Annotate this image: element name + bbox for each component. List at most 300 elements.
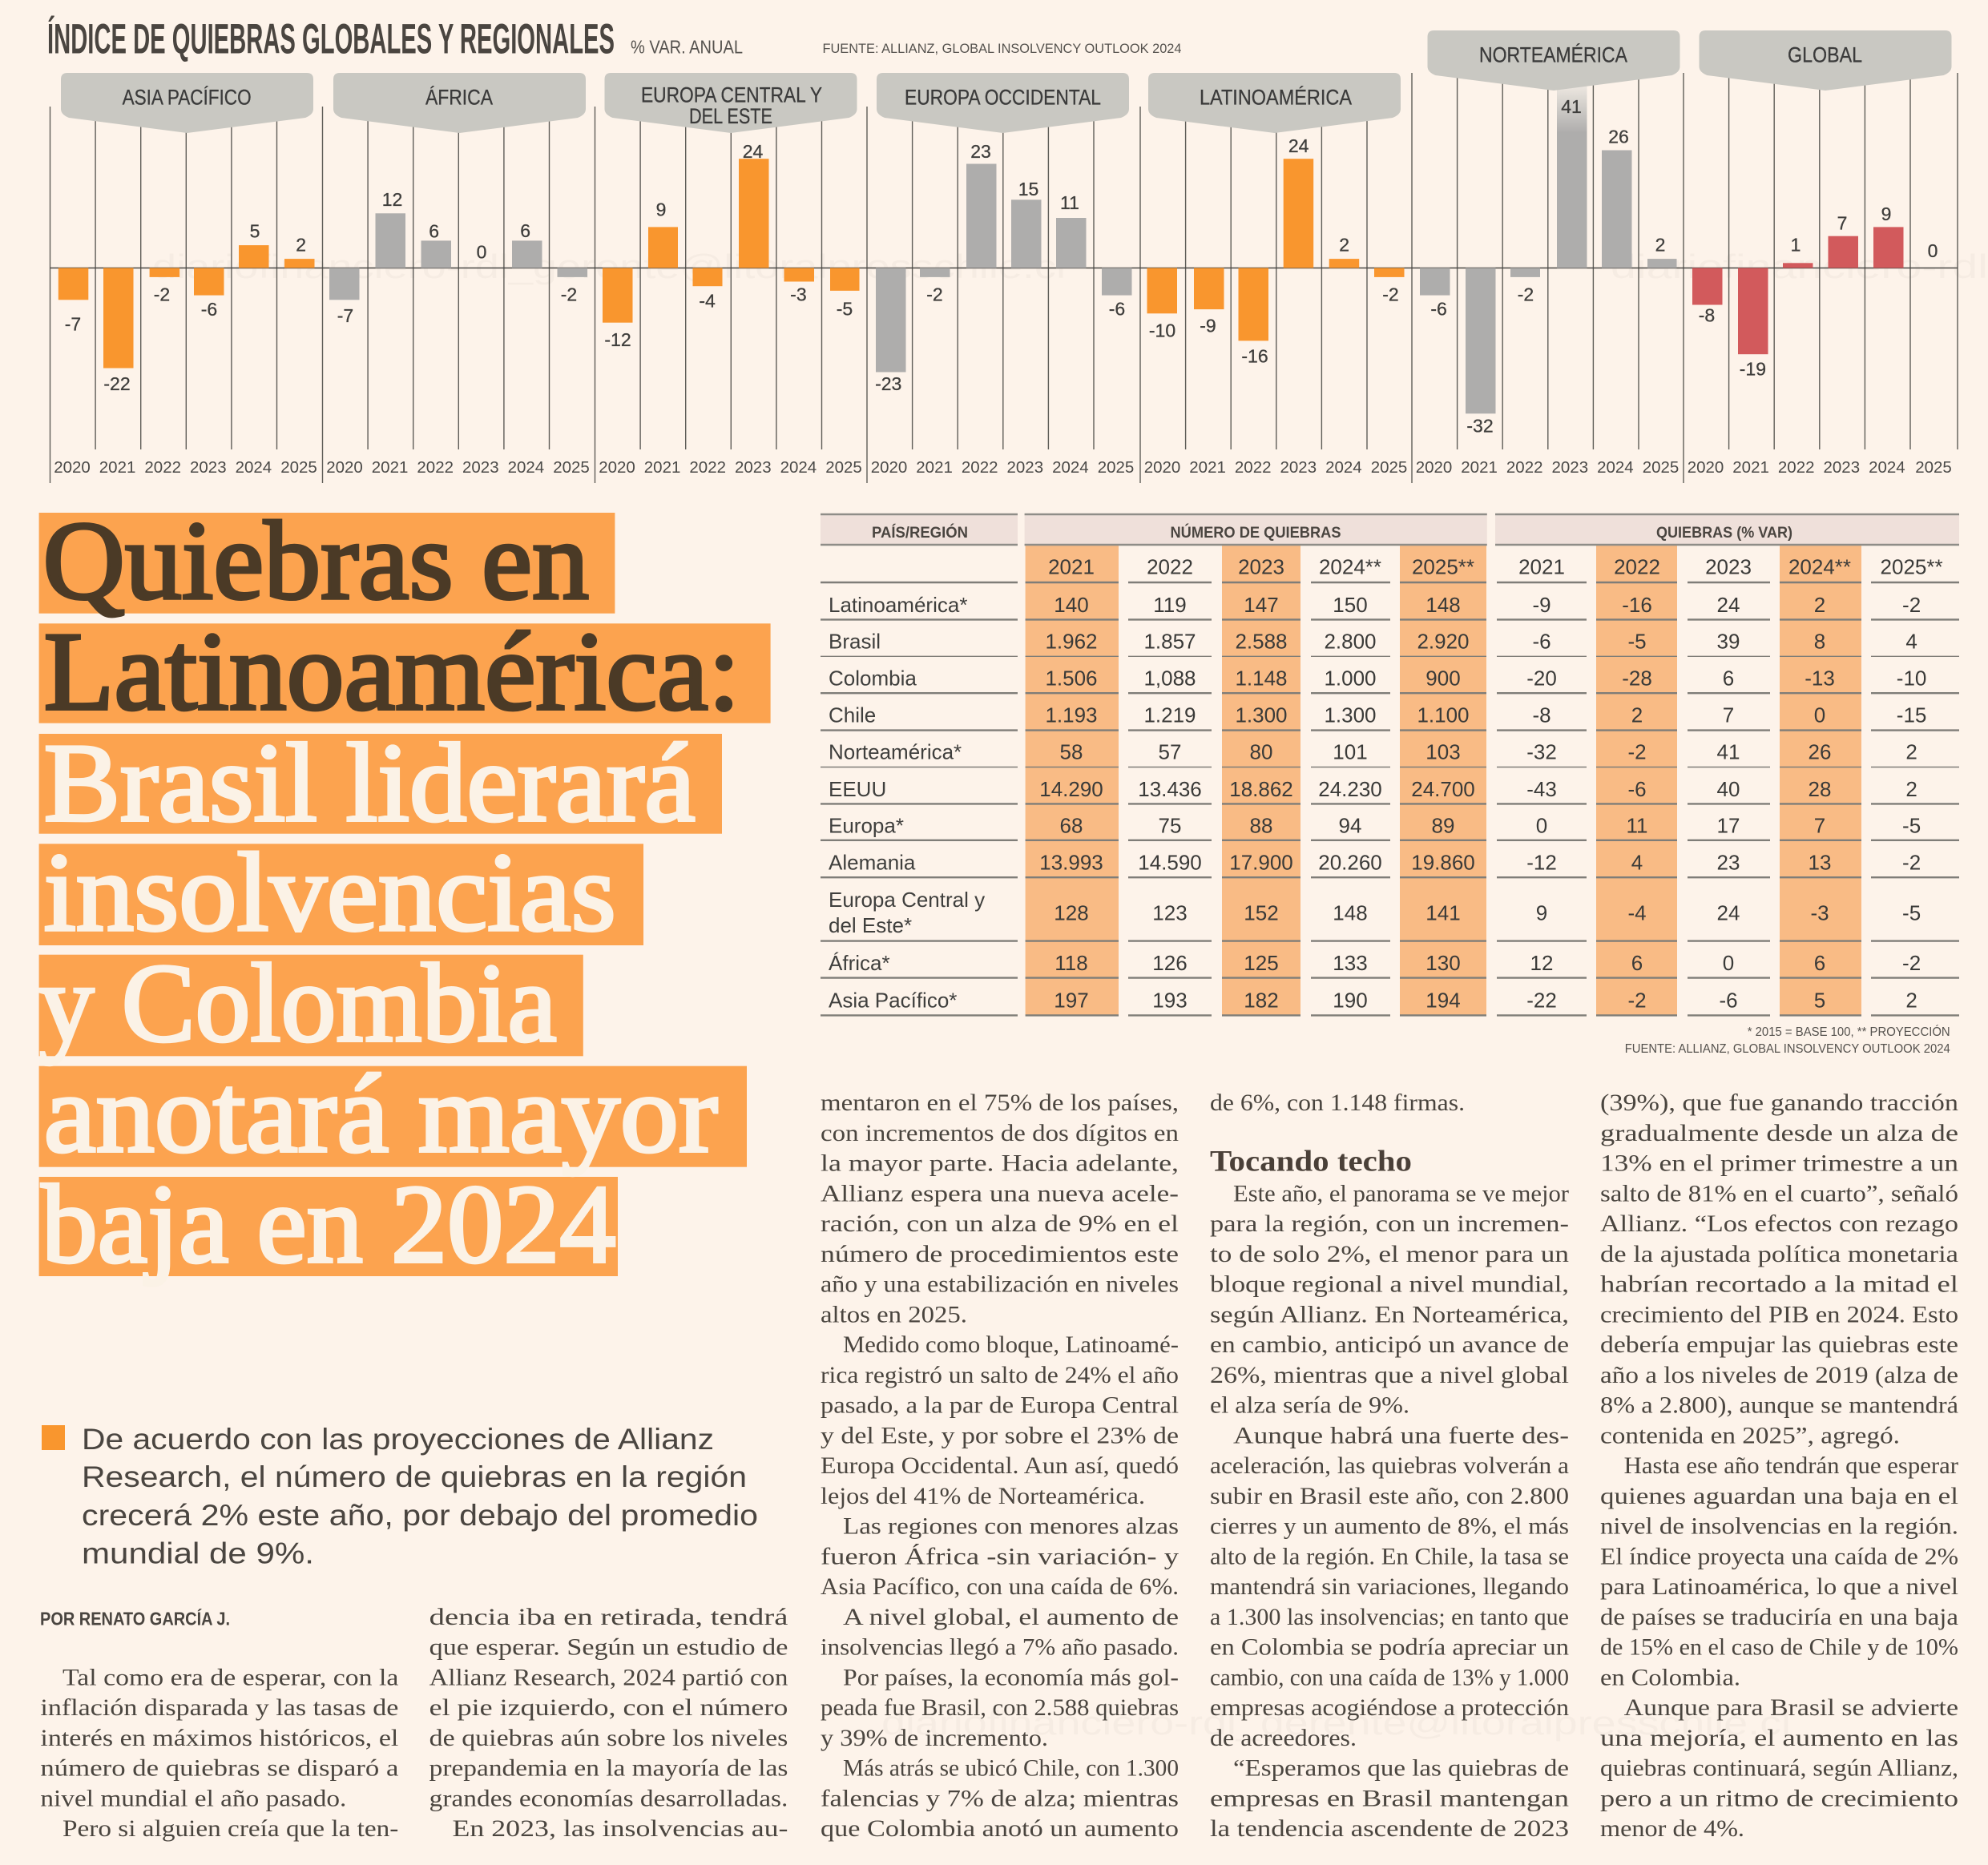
article column 3: Las regiones con menores alzas xyxy=(843,1513,1179,1540)
article column 5: Hasta ese año tendrán que esperar xyxy=(1624,1452,1958,1479)
year axis labels: 2023 xyxy=(735,458,772,477)
row: Norteamérica: 26 xyxy=(1809,740,1831,764)
article column 4: a 1.300 las insolvencias; en tanto que xyxy=(1210,1604,1569,1630)
row: Chile: Chile xyxy=(829,703,876,727)
article column 4: to de solo 2%, el menor para un xyxy=(1210,1241,1569,1267)
row: Chile: 1.300 xyxy=(1235,703,1288,727)
row: África: 133 xyxy=(1333,951,1368,975)
row: Colombia: 1.148 xyxy=(1235,667,1288,691)
row: Brasil: 2.920 xyxy=(1417,630,1470,654)
row: Latinoamérica: -16 xyxy=(1622,593,1652,617)
callout: Latinoamérica xyxy=(1148,73,1401,133)
year axis labels: 2021 xyxy=(1732,458,1769,477)
row: África: 130 xyxy=(1425,951,1461,975)
year axis labels: 2025 xyxy=(1915,458,1952,477)
year axis labels: 2020 xyxy=(54,458,91,477)
article column 5: una mejoría, el aumento en las xyxy=(1600,1725,1958,1751)
bars: Europa Central y del Este xyxy=(603,159,859,323)
value labels: -12 xyxy=(604,329,631,350)
row: Europa Central y del Este: -4 xyxy=(1627,900,1647,924)
bars: Global xyxy=(1692,227,1904,354)
row: Europa xyxy=(829,814,1921,838)
summary callout: crecerá 2% este año, por debajo del promedio xyxy=(82,1499,758,1532)
article column 5: crecimiento del PIB en 2024. Esto xyxy=(1600,1301,1958,1327)
article column 4: Este año, el panorama se ve mejor xyxy=(1233,1180,1569,1206)
value labels: 7 xyxy=(1837,213,1847,234)
row: EEUU: 28 xyxy=(1809,777,1831,801)
table highlight columns xyxy=(1026,546,1861,1015)
article column 2: el pie izquierdo, con el número xyxy=(429,1694,788,1721)
value labels: 24 xyxy=(743,141,763,162)
article column 3: Medido como bloque, Latinoamé- xyxy=(843,1331,1179,1358)
row: Colombia xyxy=(829,667,1926,691)
summary callout xyxy=(42,1423,758,1570)
callout: Asia Pacífico: ASIA PACÍFICO xyxy=(123,85,252,109)
article column 5: Aunque para Brasil se advierte xyxy=(1624,1694,1958,1721)
year axis labels: 2020 xyxy=(1416,458,1452,477)
row: África: 126 xyxy=(1152,951,1188,975)
row: África: África* xyxy=(829,951,890,975)
article column 1: Pero si alguien creía que la ten- xyxy=(63,1815,398,1842)
year axis labels: 2023 xyxy=(1006,458,1043,477)
row: Chile: 1.300 xyxy=(1324,703,1377,727)
headline: baja en 2024 xyxy=(42,1162,616,1287)
year axis labels: 2022 xyxy=(689,458,726,477)
article column 3: falencias y 7% de alza; mientras xyxy=(821,1785,1179,1811)
row: EEUU: 14.290 xyxy=(1039,777,1103,801)
article column 5: en Colombia. xyxy=(1600,1664,1740,1690)
row: EEUU: 24.230 xyxy=(1318,777,1382,801)
value labels xyxy=(65,96,1938,437)
row: EEUU xyxy=(829,777,1917,801)
article column 4: según Allianz. En Norteamérica, xyxy=(1210,1301,1569,1327)
year axis labels: 2024 xyxy=(1597,458,1634,477)
year axis labels: 2022 xyxy=(962,458,998,477)
bar chart: regional insolvency index xyxy=(50,30,1988,483)
article column 1: nivel mundial el año pasado. xyxy=(40,1785,346,1811)
row: Europa: 94 xyxy=(1339,814,1361,838)
row: Asia Pacífico: 182 xyxy=(1244,989,1279,1013)
article column 5: debería empujar las quiebras este xyxy=(1600,1331,1958,1358)
callout: Europa Central y del Este: EUROPA CENTRAL Y xyxy=(641,83,822,107)
article column 3: lejos del 41% de Norteamérica. xyxy=(821,1483,1145,1509)
callout: Europa Occidental xyxy=(877,73,1129,133)
value labels: -2 xyxy=(154,284,170,305)
table years row: 2021 xyxy=(1048,554,1095,578)
year axis labels: 2023 xyxy=(1551,458,1588,477)
row: Chile: 1.100 xyxy=(1417,703,1470,727)
headline xyxy=(39,499,771,1287)
row: Europa Central y del Este: 152 xyxy=(1244,900,1279,924)
article column 1: interés en máximos históricos, el xyxy=(40,1725,398,1751)
value labels: -9 xyxy=(1200,315,1216,336)
table years row: 2022 xyxy=(1147,554,1193,578)
year axis labels: 2025 xyxy=(1371,458,1407,477)
value labels: 5 xyxy=(250,221,260,242)
value labels: -2 xyxy=(926,284,943,305)
article column 2 xyxy=(429,1604,788,1842)
row: Brasil: 2.588 xyxy=(1235,630,1288,654)
value labels: -6 xyxy=(1109,298,1125,319)
article column 5: pero a un ritmo de crecimiento xyxy=(1600,1785,1958,1811)
row: Norteamérica: Norteamérica* xyxy=(829,740,962,764)
row: Europa: 7 xyxy=(1814,814,1825,838)
article column 5: año a los niveles de 2019 (alza de xyxy=(1600,1362,1958,1388)
year axis labels: 2023 xyxy=(1823,458,1860,477)
article column 3: año y una estabilización en niveles xyxy=(821,1271,1179,1298)
bars: Latinoamérica xyxy=(1147,159,1404,340)
article column 4: de acreedores. xyxy=(1210,1725,1357,1751)
year axis labels: 2021 xyxy=(644,458,680,477)
article column 4: empresas en Brasil mantengan xyxy=(1210,1785,1569,1811)
article column 4: alto de la región. En Chile, la tasa se xyxy=(1210,1543,1569,1569)
row: Colombia: Colombia xyxy=(829,667,917,691)
row: Colombia: 1.000 xyxy=(1324,667,1377,691)
row: Europa: 68 xyxy=(1060,814,1083,838)
article column 3: que Colombia anotó un aumento xyxy=(821,1815,1179,1842)
icon: orange square bullet xyxy=(42,1425,65,1450)
value labels: 11 xyxy=(1060,192,1079,213)
row: Norteamérica: 101 xyxy=(1333,740,1368,764)
value labels: 15 xyxy=(1018,179,1038,199)
row: Asia Pacífico: -2 xyxy=(1627,989,1647,1013)
row: Chile: 2 xyxy=(1631,703,1643,727)
year axis labels: 2025 xyxy=(1643,458,1679,477)
article column 4: bloque regional a nivel mundial, xyxy=(1210,1271,1569,1298)
article column 5: de la ajustada política monetaria xyxy=(1600,1241,1958,1267)
row: Chile: 7 xyxy=(1723,703,1734,727)
row: Norteamérica: -32 xyxy=(1526,740,1557,764)
row: Alemania: 14.590 xyxy=(1138,851,1202,875)
row: Latinoamérica xyxy=(829,593,1921,617)
row: África: 0 xyxy=(1723,951,1734,975)
year axis labels: 2020 xyxy=(871,458,907,477)
article column 5: El índice proyecta una caída de 2% xyxy=(1600,1543,1958,1569)
row: Brasil: 8 xyxy=(1814,630,1825,654)
year axis labels: 2022 xyxy=(144,458,181,477)
row: Brasil: -5 xyxy=(1627,630,1647,654)
chart title: ÍNDICE DE QUIEBRAS GLOBALES Y REGIONALES xyxy=(47,14,615,62)
article column 1: inflación disparada y las tasas de xyxy=(40,1694,398,1721)
row: EEUU: -43 xyxy=(1526,777,1557,801)
row: Asia Pacífico xyxy=(829,989,1917,1013)
row: Latinoamérica: 2 xyxy=(1814,593,1825,617)
row: Norteamérica xyxy=(829,740,1917,764)
row: Chile: -8 xyxy=(1532,703,1551,727)
article column 4: el alza sería de 9%. xyxy=(1210,1392,1409,1418)
row: Colombia: 6 xyxy=(1723,667,1734,691)
summary callout: De acuerdo con las proyecciones de Allianz xyxy=(82,1423,714,1456)
row: Europa: 0 xyxy=(1536,814,1547,838)
bars: Norteamérica xyxy=(1420,80,1676,413)
article column 5: 8% a 2.800), aunque se mantendrá xyxy=(1600,1392,1958,1418)
year axis labels: 2025 xyxy=(825,458,862,477)
row: EEUU: -6 xyxy=(1627,777,1647,801)
value labels: -8 xyxy=(1699,304,1715,325)
row: EEUU: EEUU xyxy=(829,777,886,801)
row: Alemania: 20.260 xyxy=(1318,851,1382,875)
row: Alemania: 13 xyxy=(1809,851,1831,875)
article column 5: Allianz. “Los efectos con rezago xyxy=(1600,1210,1958,1237)
article column 4: en Colombia se podría apreciar un xyxy=(1210,1634,1569,1660)
row: Colombia: 900 xyxy=(1425,667,1461,691)
year axis labels: 2025 xyxy=(553,458,590,477)
year axis labels: 2024 xyxy=(1869,458,1905,477)
row: Europa: 89 xyxy=(1432,814,1454,838)
callout: África xyxy=(333,73,586,133)
row: Colombia: 1,088 xyxy=(1143,667,1196,691)
row: África: 6 xyxy=(1814,951,1825,975)
row: Colombia: -20 xyxy=(1526,667,1557,691)
row: Europa: 88 xyxy=(1250,814,1272,838)
value labels: -4 xyxy=(699,290,716,311)
watermark in body text: diariofinanciero-rdl_gerente@litoralpresschile.cl xyxy=(881,1704,1791,1742)
article column 4 xyxy=(1210,1090,1569,1842)
row: Europa: 17 xyxy=(1717,814,1740,838)
article column 3: rica registró un salto de 24% el año xyxy=(821,1362,1179,1388)
row: África: 125 xyxy=(1244,951,1279,975)
chart source: FUENTE: ALLIANZ, GLOBAL INSOLVENCY OUTLOOK 2024 xyxy=(822,41,1181,56)
row: Latinoamérica: 24 xyxy=(1717,593,1740,617)
value labels: -32 xyxy=(1466,416,1494,437)
article column 5: gradualmente desde un alza de xyxy=(1600,1120,1958,1146)
value labels: -23 xyxy=(875,373,901,394)
row: Asia Pacífico: 190 xyxy=(1333,989,1368,1013)
article column 5: nivel de insolvencias en la región. xyxy=(1600,1513,1958,1540)
row: Norteamérica: 41 xyxy=(1717,740,1740,764)
year axis labels: 2022 xyxy=(1778,458,1815,477)
headline: anotará mayor xyxy=(44,1052,718,1176)
summary callout: Research, el número de quiebras en la región xyxy=(82,1460,747,1493)
article column 5: habrían recortado a la mitad el xyxy=(1600,1271,1958,1298)
row: Brasil: 1.962 xyxy=(1045,630,1098,654)
value labels: -2 xyxy=(561,284,577,305)
article column 3: la mayor parte. Hacia adelante, xyxy=(821,1150,1179,1176)
year axis labels: 2021 xyxy=(1461,458,1498,477)
row: África: 6 xyxy=(1631,951,1643,975)
article column 4: en cambio, anticipó un avance de xyxy=(1210,1331,1569,1358)
article column 5: 13% en el primer trimestre a un xyxy=(1600,1150,1958,1176)
headline: y Colombia xyxy=(39,941,557,1065)
table years row: 2025** xyxy=(1412,554,1474,578)
callout: África: ÁFRICA xyxy=(425,85,493,109)
row: Asia Pacífico: -22 xyxy=(1526,989,1557,1013)
year axis labels: 2020 xyxy=(1688,458,1724,477)
year axis labels: 2024 xyxy=(780,458,817,477)
year axis labels: 2023 xyxy=(190,458,227,477)
row: Europa: 11 xyxy=(1627,814,1647,838)
row: Latinoamérica: -9 xyxy=(1532,593,1551,617)
article column 4: empresas acogiéndose a protección xyxy=(1210,1694,1569,1721)
article column 4: para la región, con un incremen- xyxy=(1210,1210,1569,1237)
value labels: -3 xyxy=(790,284,807,305)
bar chart: regional insolvency index: diariofinanciero-rdl_gerente@litoralpresschile.cl xyxy=(152,248,1066,285)
value labels: -16 xyxy=(1241,346,1268,367)
year axis labels: 2021 xyxy=(916,458,953,477)
row: Europa Central y del Este: Europa Central y xyxy=(829,888,985,912)
insolvency table xyxy=(821,514,1959,1056)
article column 2: prepandemia en la mayoría de las xyxy=(429,1754,788,1782)
row: Alemania: 23 xyxy=(1717,851,1740,875)
table years row: 2023 xyxy=(1238,554,1284,578)
row: Colombia: -13 xyxy=(1805,667,1835,691)
row: Alemania: 17.900 xyxy=(1229,851,1293,875)
table source: FUENTE: ALLIANZ, GLOBAL INSOLVENCY OUTLOOK 2024 xyxy=(1625,1042,1950,1056)
year axis labels: 2023 xyxy=(1280,458,1317,477)
article column 3: Europa Occidental. Aun así, quedó xyxy=(821,1452,1179,1479)
row: Latinoamérica: 148 xyxy=(1425,593,1461,617)
value labels: 0 xyxy=(477,241,486,262)
row: Alemania: Alemania xyxy=(829,851,916,875)
table header bands: QUIEBRAS (% VAR) xyxy=(1656,525,1792,542)
article column 5: menor de 4%. xyxy=(1600,1815,1744,1842)
article column 1: Tal como era de esperar, con la xyxy=(63,1664,398,1690)
value labels: 6 xyxy=(520,220,530,241)
article column 2: En 2023, las insolvencias au- xyxy=(452,1815,788,1842)
row: Europa Central y del Este: 123 xyxy=(1152,900,1188,924)
article column 4: mantendrá sin variaciones, llegando xyxy=(1210,1573,1569,1600)
year axis labels xyxy=(54,458,1952,477)
row: Latinoamérica: -2 xyxy=(1902,593,1921,617)
value labels: -19 xyxy=(1740,359,1766,380)
value labels: 2 xyxy=(1655,235,1665,256)
row: África: -2 xyxy=(1902,951,1921,975)
article column 3: con incrementos de dos dígitos en xyxy=(821,1120,1179,1146)
row: Colombia: -28 xyxy=(1622,667,1652,691)
row: Latinoamérica: Latinoamérica* xyxy=(829,593,967,617)
table years row: 2022 xyxy=(1614,554,1660,578)
row: Europa: 75 xyxy=(1159,814,1181,838)
row: Asia Pacífico: Asia Pacífico* xyxy=(829,989,957,1013)
article column 4: de 6%, con 1.148 firmas. xyxy=(1210,1090,1465,1116)
row: Europa Central y del Este: 148 xyxy=(1333,900,1368,924)
article column 4: “Esperamos que las quiebras de xyxy=(1233,1754,1569,1782)
row: Brasil: 4 xyxy=(1905,630,1917,654)
article column 4: la tendencia ascendente de 2023 xyxy=(1210,1815,1569,1842)
bars: África xyxy=(329,213,587,300)
row: Alemania xyxy=(829,851,1921,875)
article column 4: aceleración, las quiebras volverán a xyxy=(1210,1452,1569,1479)
table years row: 2024** xyxy=(1788,554,1851,578)
row: Norteamérica: 57 xyxy=(1159,740,1181,764)
callout: Europa Occidental: EUROPA OCCIDENTAL xyxy=(905,85,1101,109)
year axis labels: 2021 xyxy=(99,458,135,477)
row: Norteamérica: 80 xyxy=(1250,740,1272,764)
row: Europa Central y del Este: del Este* xyxy=(829,913,912,937)
row: Asia Pacífico: 2 xyxy=(1905,989,1917,1013)
year axis labels: 2024 xyxy=(1052,458,1089,477)
row: Chile xyxy=(829,703,1926,727)
row: Chile: 1.219 xyxy=(1143,703,1196,727)
article column 3: mentaron en el 75% de los países, xyxy=(821,1090,1179,1116)
article column 2: que esperar. Según un estudio de xyxy=(429,1634,788,1660)
row: Asia Pacífico: 197 xyxy=(1054,989,1089,1013)
value labels: -6 xyxy=(201,299,217,320)
article column 3: peada fue Brasil, con 2.588 quiebras xyxy=(821,1694,1179,1721)
row: Europa Central y del Este: 141 xyxy=(1425,900,1461,924)
article column 5: de 15% en el caso de Chile y de 10% xyxy=(1600,1634,1958,1660)
row: Brasil: 2.800 xyxy=(1324,630,1377,654)
row: EEUU: 24.700 xyxy=(1411,777,1475,801)
row: Europa: -5 xyxy=(1902,814,1921,838)
article column 2: de quiebras aún sobre los niveles xyxy=(429,1725,788,1751)
value labels: -22 xyxy=(103,373,131,394)
value labels: 12 xyxy=(382,189,402,210)
row: Brasil: -6 xyxy=(1532,630,1551,654)
year axis labels: 2022 xyxy=(1235,458,1272,477)
article column 3: y del Este, y por sobre el 23% de xyxy=(821,1422,1179,1448)
row: Europa Central y del Este: 9 xyxy=(1536,900,1547,924)
row: Europa Central y del Este: -3 xyxy=(1810,900,1829,924)
year axis labels: 2020 xyxy=(1144,458,1180,477)
year axis labels: 2025 xyxy=(280,458,317,477)
table footnote: * 2015 = BASE 100, ** PROYECCIÓN xyxy=(1748,1024,1950,1039)
value labels: -7 xyxy=(65,313,81,334)
row: EEUU: 18.862 xyxy=(1229,777,1293,801)
row: EEUU: 40 xyxy=(1717,777,1740,801)
row: Alemania: 19.860 xyxy=(1411,851,1475,875)
year axis labels: 2024 xyxy=(236,458,272,477)
row: África xyxy=(829,951,1921,975)
chart unit label: % VAR. ANUAL xyxy=(631,36,743,57)
value labels: 9 xyxy=(656,199,666,220)
row: Latinoamérica: 147 xyxy=(1244,593,1279,617)
row: Alemania: -12 xyxy=(1526,851,1557,875)
article column 5: salto de 81% en el cuarto”, señaló xyxy=(1600,1180,1958,1206)
article column 5: quiebras continuará, según Allianz, xyxy=(1600,1754,1958,1782)
row: Norteamérica: 103 xyxy=(1425,740,1461,764)
article column 5: (39%), que fue ganando tracción xyxy=(1600,1090,1958,1116)
table header bands: PAÍS/REGIÓN xyxy=(872,524,968,542)
row: Asia Pacífico: -6 xyxy=(1719,989,1738,1013)
value labels: 23 xyxy=(970,141,991,162)
value labels: 24 xyxy=(1288,135,1309,156)
table header bands: NÚMERO DE QUIEBRAS xyxy=(1170,524,1341,542)
value labels: 9 xyxy=(1881,203,1891,224)
year axis labels: 2021 xyxy=(372,458,408,477)
table years row: 2024** xyxy=(1319,554,1381,578)
row: Europa: Europa* xyxy=(829,814,904,838)
article column 3: Por países, la economía más gol- xyxy=(843,1664,1179,1690)
article column 5: de países se traduciría en una baja xyxy=(1600,1604,1958,1630)
row: Latinoamérica: 140 xyxy=(1054,593,1089,617)
table header bands xyxy=(821,514,1959,546)
subheading: Tocando techo xyxy=(1210,1146,1412,1178)
year axis labels: 2023 xyxy=(462,458,499,477)
value labels: 0 xyxy=(1928,240,1938,261)
value labels: 2 xyxy=(1339,235,1349,256)
value labels: -5 xyxy=(837,298,853,319)
row: Chile: 0 xyxy=(1814,703,1825,727)
table years row: 2023 xyxy=(1705,554,1752,578)
year axis labels: 2025 xyxy=(1098,458,1134,477)
headline: insolvencias xyxy=(44,831,616,955)
row: Europa Central y del Este xyxy=(829,888,1921,937)
headline: Latinoamérica: xyxy=(44,610,740,734)
value labels: -6 xyxy=(1430,298,1447,319)
row: Brasil: 1.857 xyxy=(1143,630,1196,654)
article column 1: número de quiebras se disparó a xyxy=(40,1754,398,1782)
year axis labels: 2024 xyxy=(508,458,544,477)
row: Alemania: 13.993 xyxy=(1039,851,1103,875)
year axis labels: 2020 xyxy=(599,458,635,477)
row: Europa Central y del Este: -5 xyxy=(1902,900,1921,924)
row: África: 12 xyxy=(1530,951,1553,975)
article column 3: A nivel global, el aumento de xyxy=(843,1604,1179,1630)
article column 2: dencia iba en retirada, tendrá xyxy=(429,1604,788,1630)
table years row: 2021 xyxy=(1518,554,1565,578)
article column 3: y 39% de incremento. xyxy=(821,1725,1048,1751)
